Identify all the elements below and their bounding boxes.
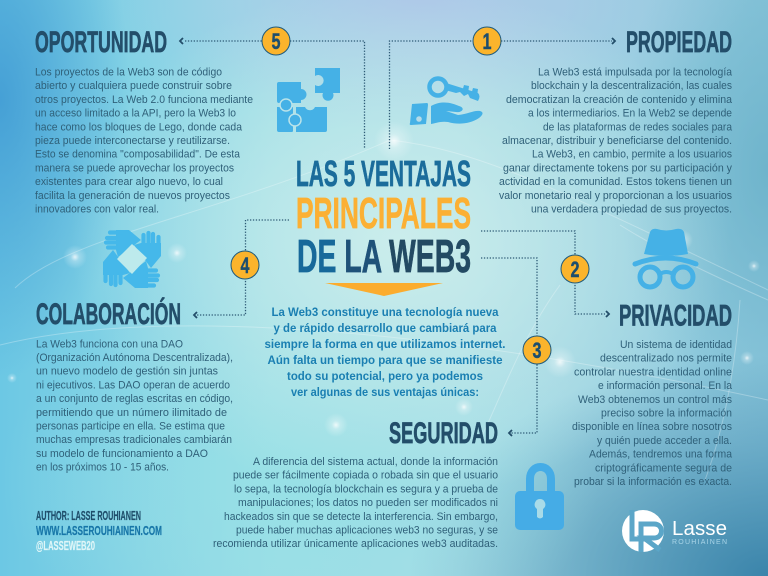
- connector lines: [180, 38, 615, 436]
- number badge 5: [262, 27, 290, 55]
- text block: propiedad: La Web3 está impulsada por la tecnología: [538, 66, 733, 78]
- author credits: WWW.LASSEROUHIAINEN.COM: [36, 524, 162, 538]
- text block: colaboracion: permitiendo que un número ilimitado de: [36, 407, 227, 419]
- logo: ROUHIAINEN: [672, 539, 727, 546]
- text block: oportunidad: [35, 66, 253, 216]
- author credits: [36, 509, 162, 553]
- panel: privacidad: [572, 300, 733, 488]
- text block: seguridad: A diferencia del sistema actual, donde la información: [253, 456, 498, 468]
- number badge 4: 4: [240, 253, 250, 278]
- icon: hat and glasses: [635, 229, 696, 287]
- text block: propiedad: La Web3, en cambio, permite a los usuarios: [532, 149, 732, 161]
- icon: padlock: [515, 467, 564, 530]
- text block: propiedad: ganar directamente tokens por su participación y: [503, 162, 732, 174]
- intro text: siempre la forma en que utilizamos internet.: [264, 337, 506, 351]
- text block: privacidad: Un sistema de identidad: [620, 339, 732, 351]
- text block: propiedad: una verdadera propiedad de sus proyectos.: [531, 204, 732, 216]
- text block: colaboracion: (Organización Autónoma Descentralizada),: [36, 352, 233, 364]
- text block: oportunidad: pieza puede interconectarse y reutilizarse.: [35, 135, 230, 147]
- text block: oportunidad: existentes para crear algo nuevo, lo cual: [35, 176, 223, 188]
- intro text: La Web3 constituye una tecnología nueva: [272, 305, 499, 319]
- text block: oportunidad: Los proyectos de la Web3 son de código: [35, 66, 222, 78]
- text block: seguridad: puede haber muchas aplicaciones web3 no seguras, y se: [236, 524, 498, 536]
- text block: oportunidad: Esto se denomina "composabilidad". De esta: [35, 149, 241, 161]
- text block: propiedad: democratizan la creación de contenido y elimina: [506, 94, 733, 106]
- text block: propiedad: valor monetario real y proporcionan a los usuarios: [499, 190, 732, 202]
- author credits: AUTHOR: LASSE ROUHIANEN: [36, 509, 141, 523]
- text block: propiedad: [499, 66, 733, 216]
- arrow: title pointer: [325, 283, 443, 296]
- text block: propiedad: de las plataformas de redes sociales para: [543, 121, 733, 133]
- text block: colaboracion: un nuevo modelo de gestión sin juntas: [36, 366, 218, 378]
- title: DE LA WEB3: [297, 230, 471, 282]
- panel: seguridad: [213, 417, 498, 550]
- panel: oportunidad: [35, 26, 253, 216]
- text block: oportunidad: abierto y cualquiera puede construir sobre: [35, 80, 232, 92]
- text block: colaboracion: en los próximos 10 - 15 años.: [36, 462, 169, 474]
- number badge 1: [473, 27, 501, 55]
- number badge 5: 5: [272, 29, 280, 54]
- text block: privacidad: [572, 339, 733, 488]
- logo: Lasse: [672, 517, 727, 540]
- number badge 2: 2: [570, 257, 580, 282]
- icon: puzzle: [277, 68, 340, 132]
- text block: oportunidad: manera se puede aprovechar los proyectos: [35, 162, 234, 174]
- text block: oportunidad: hace como los bloques de Lego, donde cada: [35, 121, 243, 133]
- text block: privacidad: criptográficamente segura de: [595, 462, 732, 474]
- text block: colaboracion: [36, 338, 233, 474]
- text block: colaboracion: su modelo de funcionamiento a DAO: [36, 448, 208, 460]
- title: PRINCIPALES: [296, 189, 471, 238]
- intro text: y de rápido desarrollo que cambiará para: [274, 321, 497, 335]
- number badge 3: [523, 336, 551, 364]
- panel: colaboracion: [36, 297, 233, 474]
- text block: colaboracion: a un conjunto de reglas escritas en código,: [36, 393, 233, 405]
- text block: propiedad: blockchain y la descentralización, las cuales: [531, 80, 732, 92]
- text block: privacidad: preciso sobre la información: [601, 408, 732, 420]
- text block: colaboracion: personas participe en ella. Se estima que: [36, 420, 225, 432]
- intro text: todo su potencial, pero ya podemos: [287, 369, 483, 383]
- text block: privacidad: disponible en línea sobre nosotros: [572, 421, 732, 433]
- text block: privacidad: controlar nuestra identidad online: [574, 366, 732, 378]
- number badge 2: [561, 255, 589, 283]
- text block: oportunidad: innovadores con valor real.: [35, 204, 159, 216]
- text block: privacidad: descentralizado nos permite: [600, 353, 732, 365]
- text block: privacidad: y quién puede acceder a ella.: [597, 435, 732, 447]
- text block: colaboracion: La Web3 funciona con una DAO: [36, 338, 183, 350]
- text block: oportunidad: un acceso limitado a la API, pero la Web3 lo: [35, 108, 236, 120]
- text block: propiedad: almacenar, distribuir y beneficiarse del contenido.: [502, 135, 732, 147]
- text block: colaboracion: ni ejecutivos. Las DAO operan de acuerdo: [36, 379, 230, 391]
- text block: propiedad: actividad en la comunidad. Estos tokens tienen un: [499, 176, 732, 188]
- icon: hands in circle: [103, 230, 161, 288]
- text block: privacidad: probar si la información es exacta.: [574, 476, 732, 488]
- title: [296, 153, 471, 282]
- number badge 3: 3: [532, 338, 542, 363]
- text block: privacidad: e información personal. En la: [598, 380, 733, 392]
- heading: oportunidad: OPORTUNIDAD: [35, 26, 167, 59]
- number badge 4: [231, 251, 259, 279]
- text block: seguridad: recomienda utilizar únicamente aplicaciones web3 auditadas.: [213, 538, 498, 550]
- title: LAS 5 VENTAJAS: [296, 153, 471, 194]
- text block: colaboracion: muchas empresas tradicionales cambiarán: [36, 434, 232, 446]
- author credits: @LASSEWEB20: [36, 539, 95, 553]
- text block: oportunidad: facilita la generación de nuevos proyectos: [35, 190, 230, 202]
- text block: seguridad: puede ser fácilmente copiada o robada sin que el usuario: [233, 470, 498, 482]
- heading: colaboracion: COLABORACIÓN: [36, 297, 181, 331]
- icon: key in hand: [410, 78, 483, 125]
- intro text: [264, 305, 506, 399]
- text block: seguridad: [213, 456, 498, 550]
- text block: propiedad: a los intermediarios. En la Web2 se depende: [528, 108, 732, 120]
- panel: propiedad: [499, 26, 733, 216]
- intro text: ver algunas de sus ventajas únicas:: [291, 385, 479, 399]
- number badge 1: 1: [482, 29, 492, 54]
- text block: privacidad: Además, tendremos una forma: [589, 449, 733, 461]
- text block: seguridad: hackeados sin que se detecte la interferencia. Sin embargo,: [224, 511, 498, 523]
- text block: seguridad: lo sepa, la tecnología blockchain es segura y a prueba de: [234, 483, 498, 495]
- text block: privacidad: Web3 obtenemos un control más: [578, 394, 732, 406]
- logo: [622, 510, 727, 552]
- text block: oportunidad: otros proyectos. La Web 2.0 funciona mediante: [35, 94, 253, 106]
- text block: seguridad: manipulaciones; los datos no pueden ser modificados ni: [238, 497, 498, 509]
- heading: seguridad: SEGURIDAD: [389, 417, 498, 450]
- intro text: Aún falta un tiempo para que se manifieste: [268, 353, 503, 367]
